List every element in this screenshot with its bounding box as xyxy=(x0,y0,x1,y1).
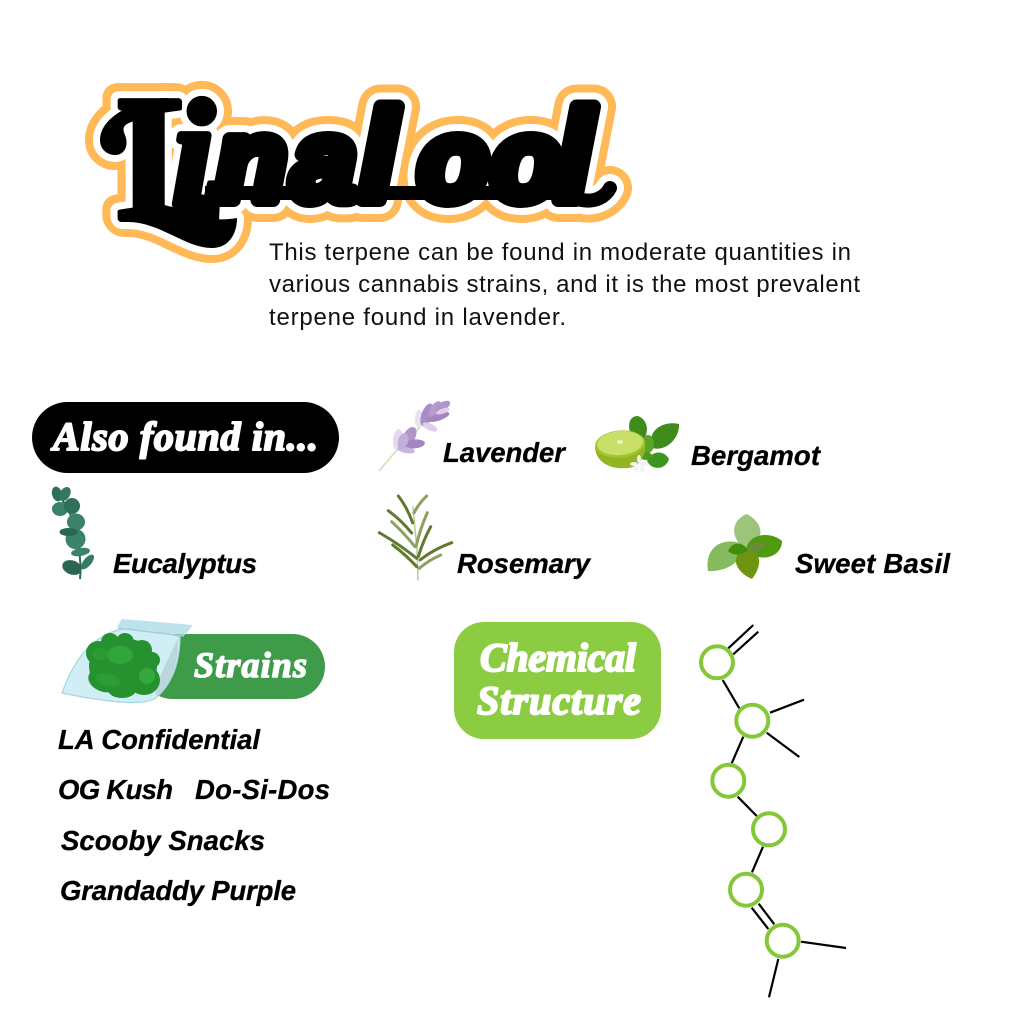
label: Sweet Basil: Sweet Basil xyxy=(795,548,951,579)
heading pill: Strains with bag icon xyxy=(62,619,325,702)
icon: bergamot xyxy=(594,416,679,472)
icon: bag of cannabis xyxy=(62,619,193,702)
pill: Strains: Strains xyxy=(194,645,307,685)
strain names: LA Confidential xyxy=(58,724,261,755)
heading panel: Chemical Structure: Chemical xyxy=(480,635,637,680)
label: Rosemary: Rosemary xyxy=(457,548,592,579)
title: Linalool: l xyxy=(556,84,595,228)
title: Linalool: l xyxy=(556,84,595,228)
description text: This terpene can be found in moderate quantities in xyxy=(269,239,851,266)
icon: rosemary xyxy=(379,496,452,580)
title: Linalool: o xyxy=(491,97,561,225)
title: Linalool xyxy=(92,59,610,259)
strain names xyxy=(58,724,330,906)
title: Linalool: l xyxy=(556,84,595,228)
title: Linalool: a xyxy=(292,97,356,225)
title: Linalool: o xyxy=(418,97,488,225)
strain names: Scooby Snacks xyxy=(61,825,265,856)
title: Linalool: l xyxy=(360,84,399,228)
label: Eucalyptus: Eucalyptus xyxy=(113,548,257,579)
title: Linalool: o xyxy=(418,97,488,225)
icon: sweet basil xyxy=(707,514,782,579)
description text: terpene found in lavender. xyxy=(269,304,566,331)
label: Bergamot: Bergamot xyxy=(691,440,822,471)
description text: various cannabis strains, and it is the most prevalent xyxy=(269,271,860,298)
title: Linalool: o xyxy=(418,97,488,225)
heading panel: Chemical Structure: Structure xyxy=(477,678,641,723)
title: Linalool: i xyxy=(172,71,214,237)
title: Linalool: n xyxy=(216,97,286,225)
title: Linalool: L xyxy=(92,59,239,259)
title: Linalool: o xyxy=(491,97,561,225)
strain names: OG Kush xyxy=(58,774,173,805)
strain names: Do-Si-Dos xyxy=(195,774,330,805)
heading pill: Also found in xyxy=(32,402,339,473)
title: Linalool: n xyxy=(216,97,286,225)
title: Linalool: n xyxy=(216,97,286,225)
icon: lavender xyxy=(379,399,452,471)
title: Linalool: l xyxy=(360,84,399,228)
chart: linalool molecule chemical structure xyxy=(701,625,846,997)
title: Linalool: a xyxy=(292,97,356,225)
title: Linalool: l xyxy=(360,84,399,228)
title: Linalool: i xyxy=(172,71,214,237)
description text xyxy=(269,239,860,331)
strain names: Grandaddy Purple xyxy=(60,875,296,906)
title: Linalool: o xyxy=(491,97,561,225)
title: Linalool: L xyxy=(92,59,239,259)
icon: eucalyptus xyxy=(50,485,96,579)
title: Linalool: i xyxy=(172,71,214,237)
title: Linalool: L xyxy=(92,59,239,259)
pill: Strains xyxy=(140,634,325,699)
label: Lavender: Lavender xyxy=(443,437,566,468)
heading pill: Also found in: Also found in... xyxy=(50,414,318,459)
icon: bud xyxy=(85,633,160,698)
title: Linalool: a xyxy=(292,97,356,225)
heading panel: Chemical Structure xyxy=(454,622,661,739)
